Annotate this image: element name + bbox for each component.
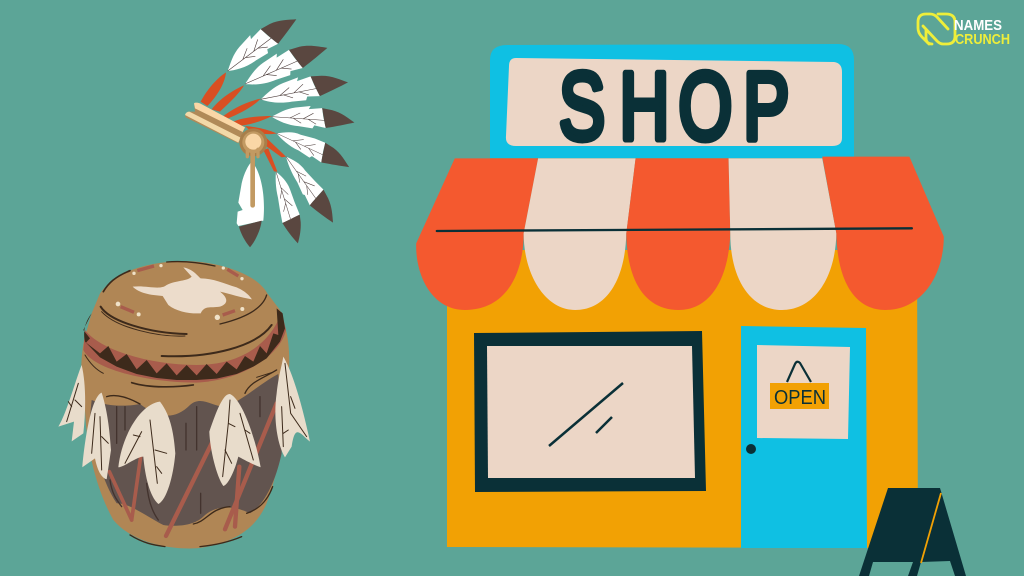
drum zigzag	[83, 308, 285, 380]
door notice	[757, 345, 850, 439]
door knob	[746, 444, 756, 454]
icon: feather headdress	[185, 7, 355, 247]
drum feather right	[275, 357, 310, 457]
logo: Names Crunch	[918, 14, 1010, 48]
drum dark contour strokes	[85, 262, 277, 547]
open hook	[787, 362, 811, 382]
drum bull skull	[133, 267, 252, 313]
drum feather veins	[67, 363, 307, 483]
drum feather left	[82, 393, 111, 479]
feather 4	[271, 103, 355, 131]
awning stripe 4	[729, 158, 836, 310]
headdress band	[185, 103, 245, 143]
icon: decorated drum	[58, 261, 310, 548]
awning stripe 3	[626, 158, 730, 310]
drum feather centre right	[209, 394, 261, 486]
feather 3	[258, 68, 350, 109]
shop sign text: SHOP	[559, 52, 789, 160]
drum feather centre left	[118, 402, 175, 504]
shop building	[416, 44, 944, 548]
drum grey painted zone	[90, 374, 282, 526]
icon: a-frame pavement sign	[859, 488, 966, 576]
drum red band	[83, 312, 286, 383]
drum feather far left	[58, 365, 85, 441]
drum sticks	[109, 403, 277, 536]
feather 1	[219, 7, 302, 79]
logo word CRUNCH: CRUNCH	[955, 32, 1010, 48]
awning stripe 5	[822, 157, 944, 310]
drum body	[81, 261, 289, 548]
awning line	[437, 228, 912, 231]
logo mark	[918, 14, 955, 44]
feather 6	[279, 150, 342, 228]
feather 8 dark tip	[239, 221, 262, 247]
open plaque: OPEN	[774, 387, 826, 409]
shop orange wall	[447, 250, 918, 548]
awning stripe 1	[416, 158, 538, 310]
shop awning	[416, 157, 944, 310]
feather 7	[268, 169, 308, 246]
feather 2	[239, 34, 331, 93]
feather 5	[273, 122, 354, 175]
awning stripe 2	[524, 158, 636, 310]
headdress red sticks	[201, 72, 286, 172]
feather 8 long	[237, 162, 264, 226]
headdress medallion	[239, 128, 267, 205]
shop door	[741, 326, 867, 548]
shop sign board	[490, 44, 854, 160]
logo word NAMES: NAMES	[954, 17, 1002, 34]
drum lid ornaments	[116, 264, 244, 320]
shop window	[474, 331, 706, 492]
